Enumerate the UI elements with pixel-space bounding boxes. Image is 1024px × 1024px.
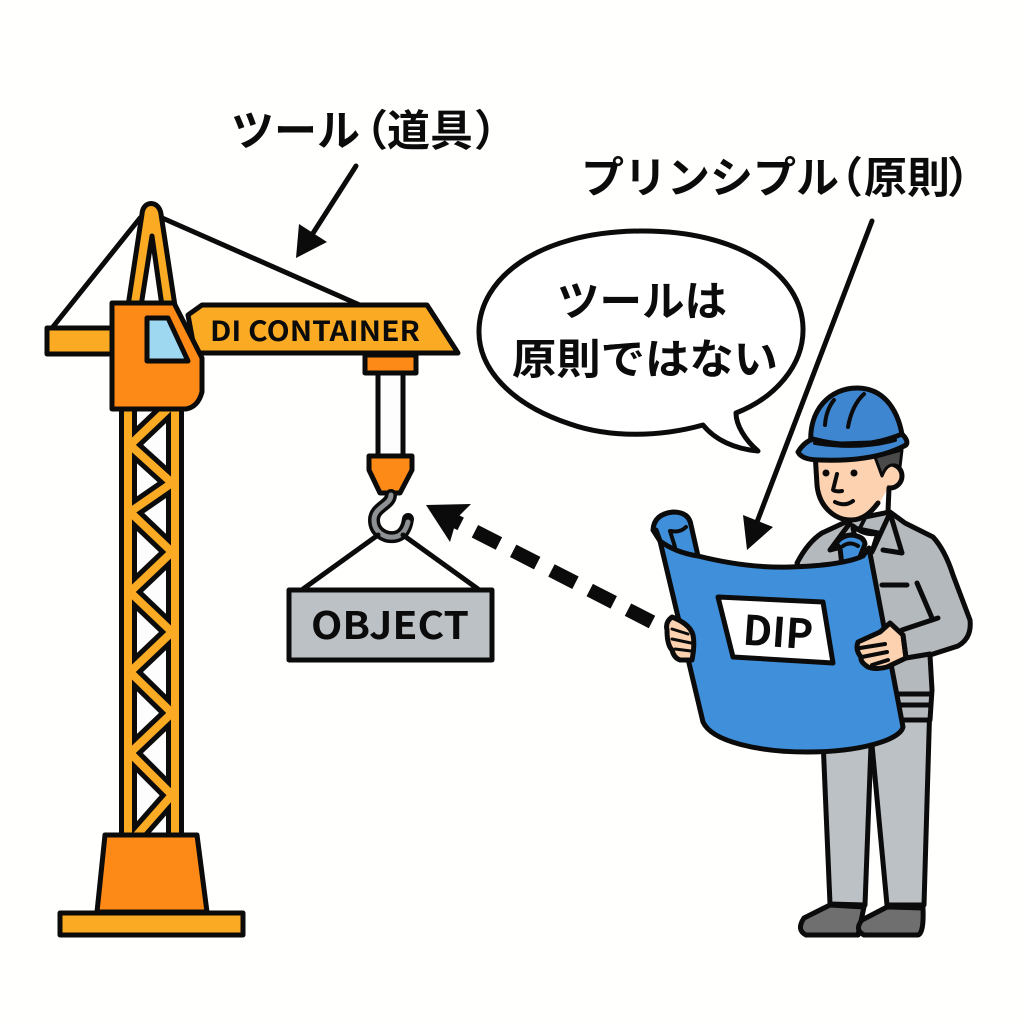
left hand xyxy=(667,617,694,660)
crane back jib xyxy=(47,328,115,354)
heading: principle label: 原則 xyxy=(864,144,950,206)
crane cab xyxy=(112,303,202,409)
trolley xyxy=(365,355,416,373)
hook block xyxy=(369,456,412,493)
arrow: principle label to blueprint xyxy=(743,221,872,550)
heading: tool label: 道具 xyxy=(387,97,473,159)
heading: principle label: ） xyxy=(947,144,990,206)
shirt and collar xyxy=(830,513,902,553)
heading: principle label: プリンシプル xyxy=(581,144,839,206)
heading: tool label: （ xyxy=(345,97,388,159)
right hand xyxy=(857,623,906,668)
worker xyxy=(653,388,970,935)
speech bubble: 原則ではない xyxy=(512,326,778,387)
shoes xyxy=(800,905,923,935)
heading: tool label: ツール xyxy=(231,97,360,159)
hanging object panel: OBJECT xyxy=(311,595,469,650)
trousers xyxy=(823,700,930,905)
blueprint label: DIP xyxy=(741,597,815,661)
face xyxy=(815,450,889,528)
ear xyxy=(878,464,902,488)
crane xyxy=(47,204,478,935)
hair xyxy=(875,450,902,476)
hook xyxy=(374,495,408,537)
small blueprint roll xyxy=(836,535,865,566)
blueprint label xyxy=(718,597,833,663)
blueprint sheet xyxy=(653,512,903,752)
heading: tool label: ） xyxy=(474,97,517,159)
crane mast peak xyxy=(128,204,175,306)
crane main jib xyxy=(188,305,458,353)
speech bubble xyxy=(479,231,803,451)
speech bubble: ツールは xyxy=(557,268,727,329)
hook shaft xyxy=(378,373,403,457)
eyes, nose and mouth xyxy=(823,470,857,504)
jacket torso xyxy=(797,512,970,720)
slings xyxy=(303,535,478,589)
hard hat xyxy=(798,388,907,460)
cab window xyxy=(147,318,188,361)
crane base xyxy=(97,835,207,912)
belt xyxy=(898,694,931,705)
heading: principle label xyxy=(581,144,990,206)
jacket details xyxy=(882,583,938,630)
arrow: tool label to crane xyxy=(296,166,356,258)
dashed arrow: blueprint to hook xyxy=(426,504,652,622)
crane jib label: DI CONTAINER xyxy=(210,310,420,350)
sleeve cuff xyxy=(903,635,930,658)
heading: principle label: （ xyxy=(820,144,863,206)
crane cables xyxy=(52,217,362,328)
hanging object panel xyxy=(289,590,492,660)
heading: tool label xyxy=(231,97,517,159)
crane foot xyxy=(60,913,243,935)
crane lattice tower xyxy=(119,405,184,837)
